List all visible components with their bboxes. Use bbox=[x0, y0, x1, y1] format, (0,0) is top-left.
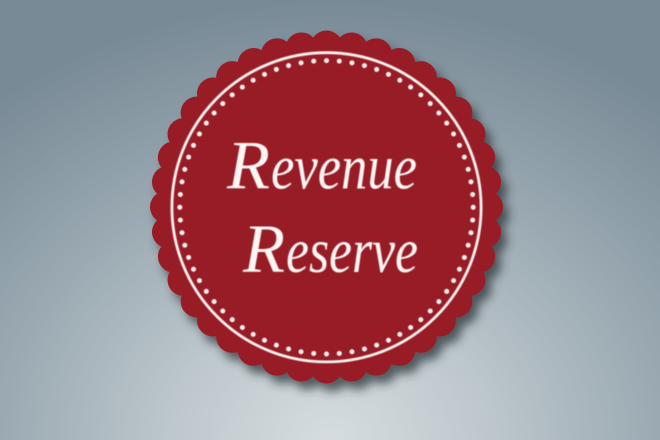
white ring bbox=[172, 53, 481, 362]
text: Reserve: eserve bbox=[286, 215, 418, 286]
text: Revenue: R bbox=[226, 128, 270, 204]
text: Reserve: R bbox=[242, 211, 285, 287]
badge text bbox=[226, 128, 418, 287]
dotted ring bbox=[180, 61, 473, 354]
text: Revenue: evenue bbox=[271, 132, 417, 202]
scalloped seal bbox=[164, 45, 488, 369]
badge bbox=[164, 45, 488, 369]
